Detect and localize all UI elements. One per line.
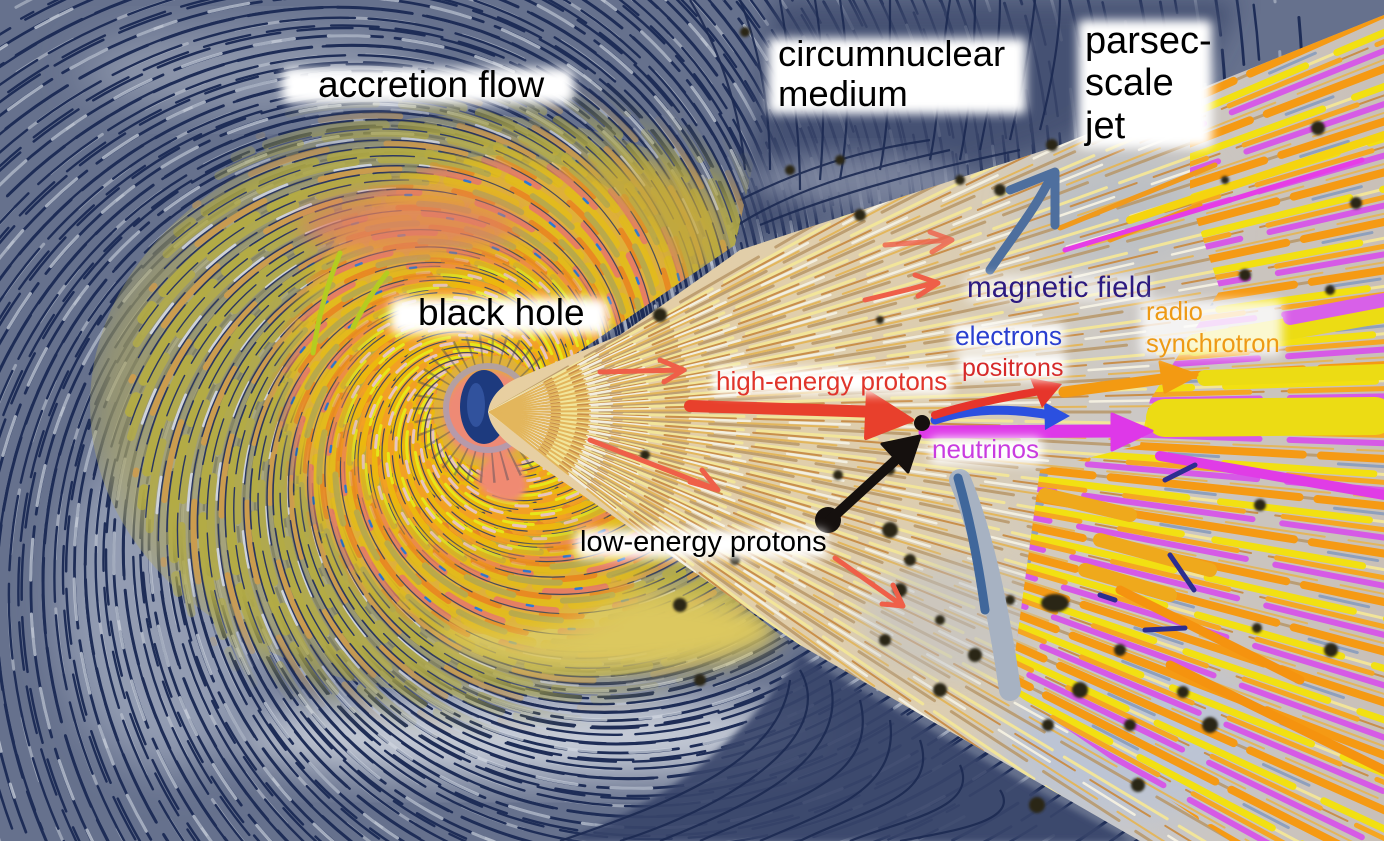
bold jet bands <box>1045 135 1384 770</box>
arrows: minor high-energy protons <box>590 232 952 606</box>
label: radio synchrotron: synchrotron <box>1146 330 1280 358</box>
arrow: neutrinos <box>925 414 1152 450</box>
label: electrons: electrons <box>955 321 1062 351</box>
label: circumnuclear medium: circumnuclear <box>778 33 1005 74</box>
arrow: electrons <box>935 402 1070 430</box>
label: parsec-scale jet: jet <box>1084 105 1126 147</box>
accretion flow swirl <box>90 90 791 733</box>
label: parsec-scale jet: parsec- <box>1085 20 1212 62</box>
label: parsec-scale jet: scale <box>1085 62 1174 104</box>
outer olive strands <box>125 90 762 733</box>
jet cone <box>461 0 1384 841</box>
label: radio synchrotron: radio <box>1146 298 1203 326</box>
arrow: radio synchrotron <box>1064 362 1197 392</box>
label: black hole: black hole <box>418 292 585 333</box>
label: parsec-scale jet <box>1078 20 1212 148</box>
label: neutrinos: neutrinos <box>932 434 1039 464</box>
jet streaks <box>461 0 1384 841</box>
arrow: low-energy protons <box>815 436 920 533</box>
arrow: field line upper <box>990 172 1055 270</box>
interaction point <box>914 415 930 431</box>
middle orange strands <box>266 136 700 652</box>
label: accretion flow: accretion flow <box>318 64 544 105</box>
arrow: high-energy protons <box>690 392 912 438</box>
label: low-energy protons: low-energy protons <box>580 526 827 558</box>
black hole <box>428 348 548 502</box>
label: positrons: positrons <box>962 354 1063 382</box>
label: radio synchrotron <box>1140 298 1282 358</box>
inner yellow strands <box>322 242 624 578</box>
label: magnetic field: magnetic field <box>967 271 1152 304</box>
label: circumnuclear medium <box>768 33 1026 114</box>
arrow: positrons <box>935 378 1062 415</box>
upper dark wedge <box>735 0 1240 245</box>
arrow: field line lower <box>958 478 1010 690</box>
label: high-energy protons: high-energy protons <box>716 366 947 396</box>
dust grains <box>640 27 1362 813</box>
lower dark wedge <box>560 655 1130 841</box>
label: circumnuclear medium: medium <box>778 73 908 114</box>
